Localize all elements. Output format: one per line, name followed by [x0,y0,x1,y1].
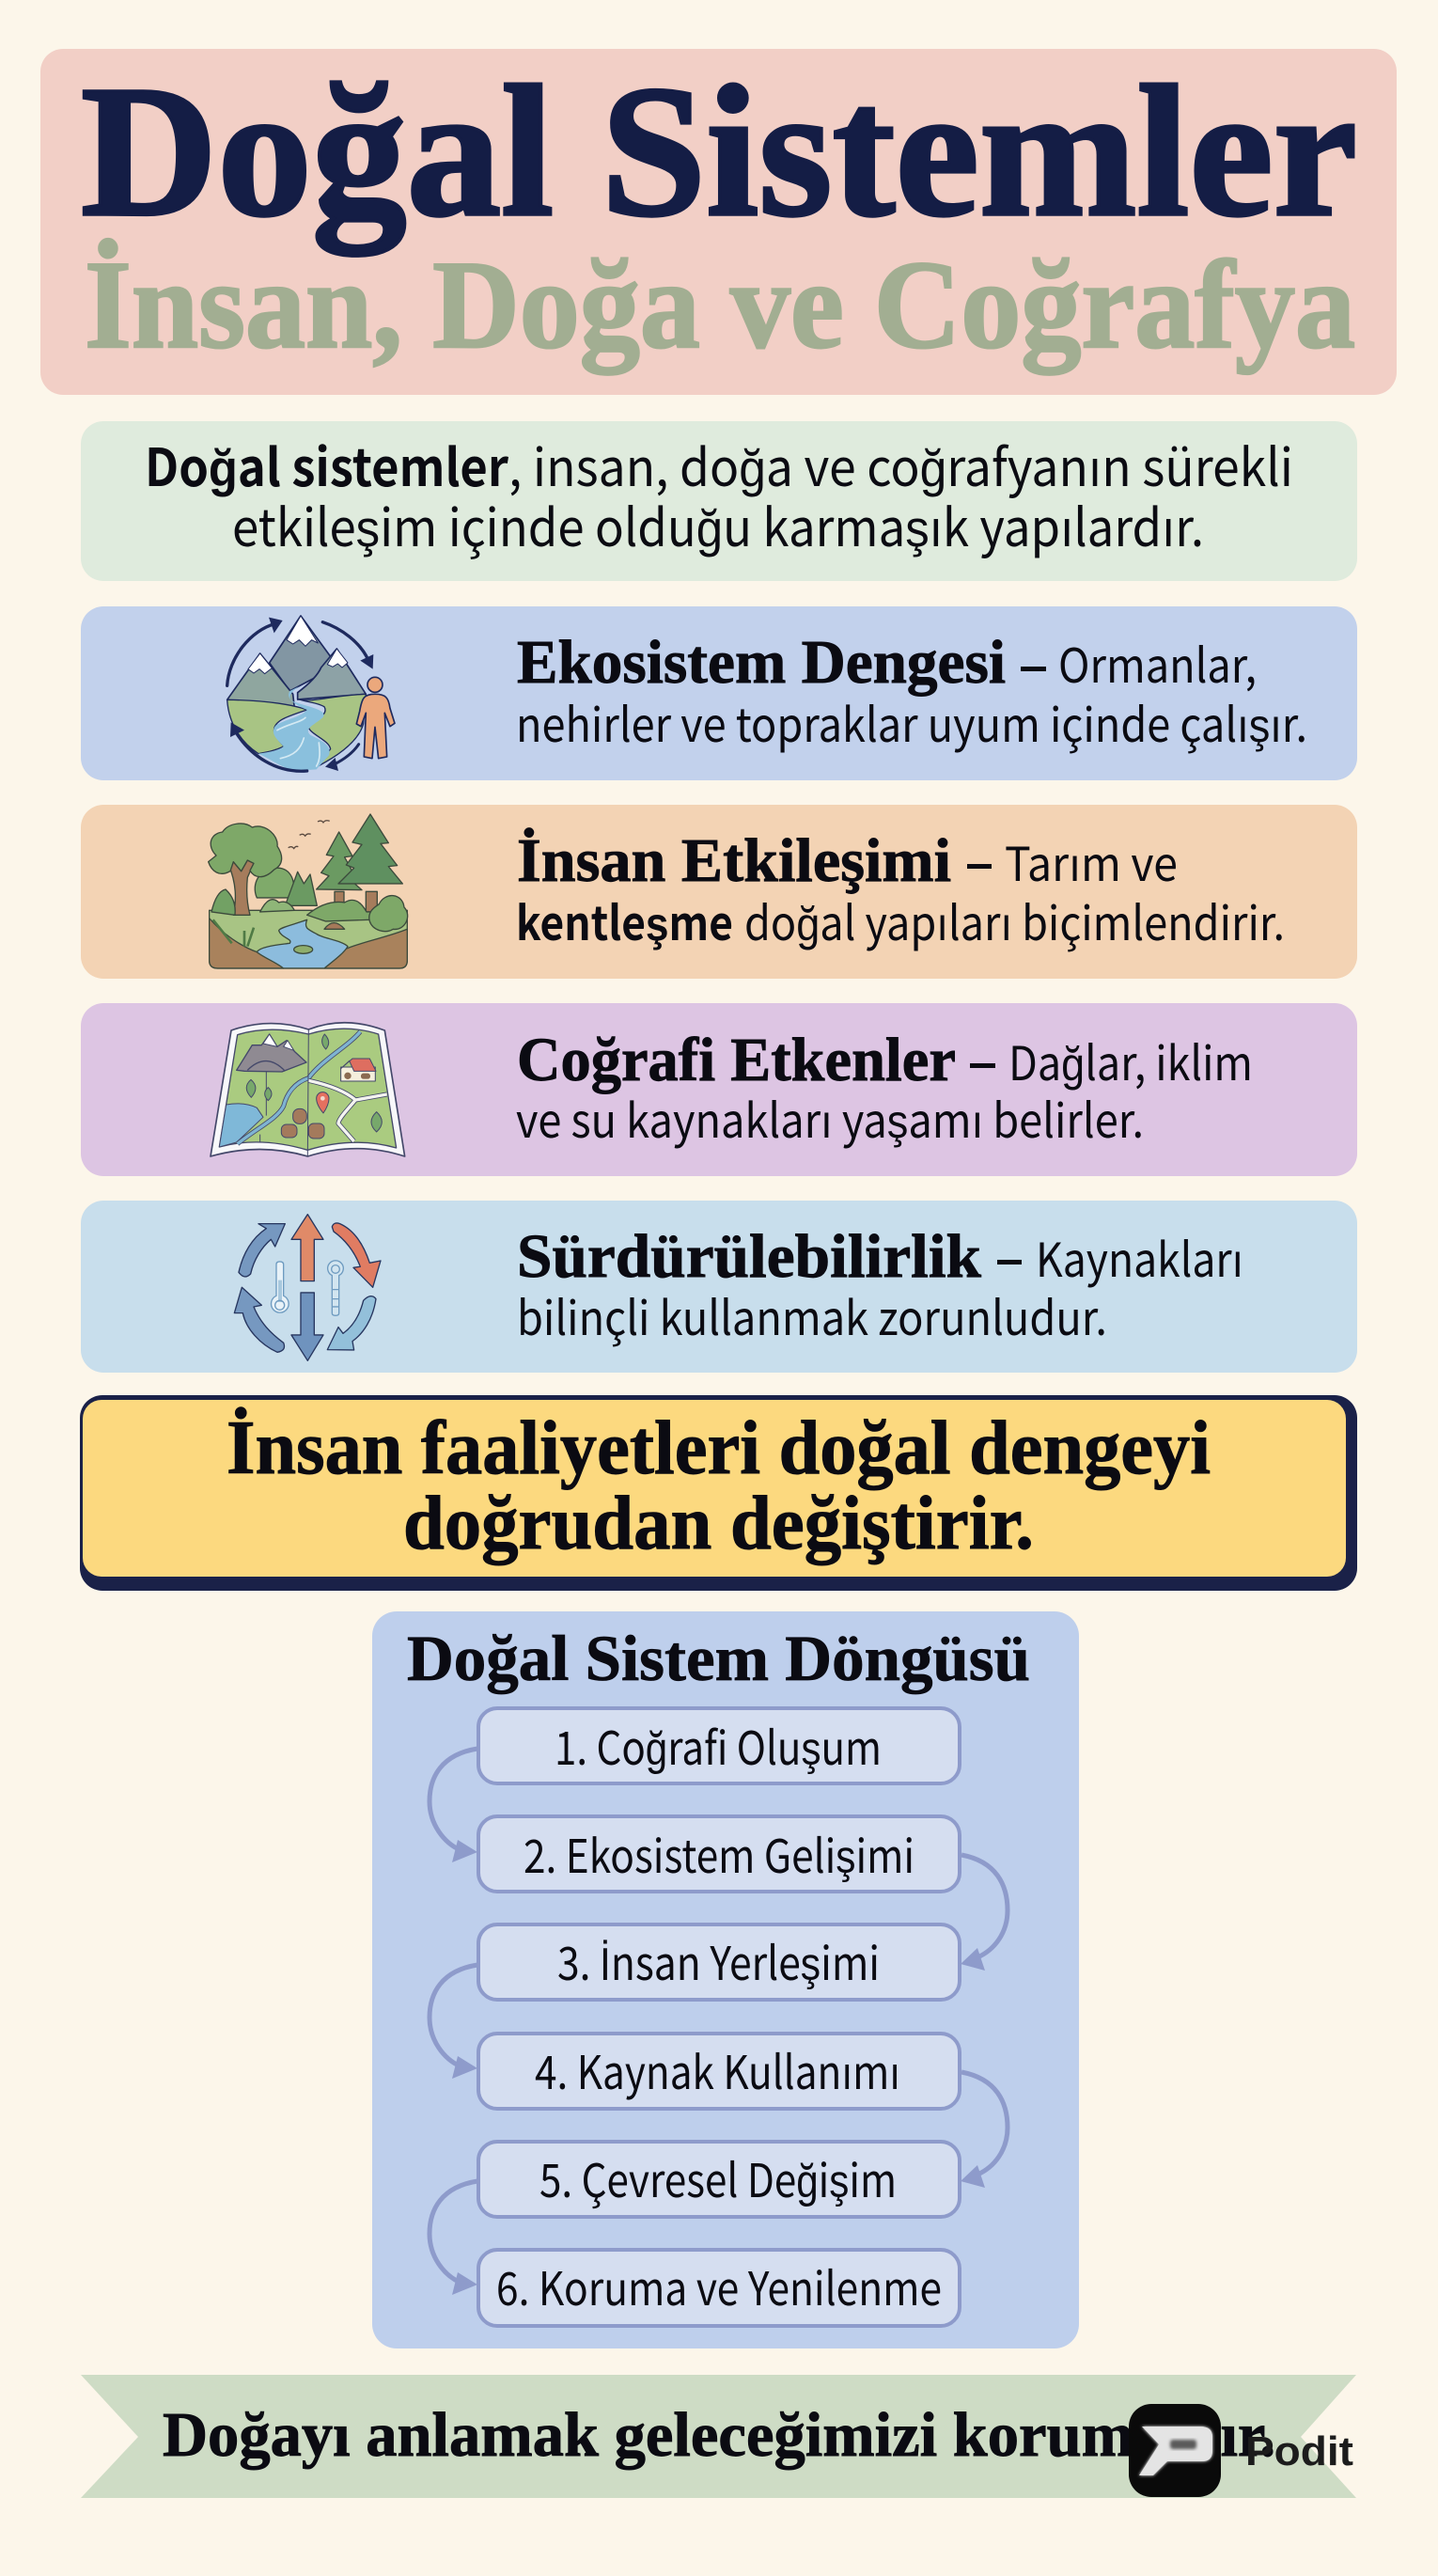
panel: insan etkileşimi [81,805,1357,979]
watermark wordmark: Podit [1245,2428,1353,2474]
banner text: Doğayı anlamak geleceğimizi korumaktır. [163,2400,1275,2470]
card text line 2: ve su kaynakları yaşamı belirler. [516,1084,1144,1152]
icon: cycle arrows with thermometers [234,1215,381,1360]
closing ribbon banner [81,2375,1356,2498]
callout line 2: doğrudan değiştirir. [403,1480,1034,1565]
intro bold term: Doğal sistemler [145,426,509,501]
card text line 2: doğal yapıları biçimlendirir. [744,887,1285,954]
card text line 1: Kaynakları [1036,1223,1243,1291]
callout [80,1395,1357,1591]
card text line 2: bilinçli kullanmak zorunludur. [517,1281,1107,1349]
card heading: İnsan Etkileşimi [517,826,951,895]
card dash [1021,667,1046,671]
icon: forest and river landscape [209,814,408,968]
step 2: 2. Ekosistem Gelişimi [524,1820,914,1887]
title panel [40,48,1397,395]
watermark logo [1129,2404,1353,2497]
arrow: step 2 to 3 [961,1855,1008,1971]
panel: natural system cycle [372,1611,1079,2348]
card text line 1: Tarım ve [1005,827,1178,895]
cycle heading: Doğal Sistem Döngüsü [407,1623,1030,1694]
card heading: Ekosistem Dengesi [517,628,1006,697]
intro line 1: , insan, doğa ve coğrafyanın sürekli [508,426,1293,501]
step 4: 4. Kaynak Kullanımı [535,2036,900,2103]
icon: mountains, river and person cycle [227,616,395,771]
card dash [997,1260,1022,1264]
icon: folded map [211,1023,405,1156]
panel: ekosistem dengesi [81,606,1357,780]
arrow: step 4 to 5 [961,2072,1008,2188]
card dash [967,864,992,869]
arrow: step 5 to 6 [430,2181,477,2295]
step 3: 3. İnsan Yerleşimi [557,1927,880,1994]
card dash [970,1063,995,1068]
card text line 1: Dağlar, iklim [1008,1027,1253,1094]
panel: introduction [81,421,1357,581]
card heading: Sürdürülebilirlik [517,1222,981,1291]
title: Doğal Sistemler [81,48,1357,256]
card heading: Coğrafi Etkenler [517,1026,956,1094]
arrow: step 3 to 4 [430,1965,477,2079]
panel: sürdürülebilirlik [81,1201,1357,1373]
subtitle: İnsan, Doğa ve Coğrafya [85,235,1355,375]
arrow: step 1 to 2 [430,1749,477,1862]
callout line 1: İnsan faaliyetleri doğal dengeyi [227,1405,1211,1490]
card text line 1: Ormanlar, [1058,629,1257,697]
step 6: 6. Koruma ve Yenilenme [496,2253,942,2319]
step 3 [478,1924,960,2000]
step 5: 5. Çevresel Değişim [539,2144,897,2211]
card bold word: kentleşme [516,887,733,954]
step 1: 1. Coğrafi Oluşum [555,1712,882,1779]
intro line 2: etkileşim içinde olduğu karmaşık yapılardır. [232,486,1204,561]
panel: coğrafi etkenler [81,1003,1357,1176]
card text line 2: nehirler ve topraklar uyum içinde çalışır. [516,688,1307,756]
